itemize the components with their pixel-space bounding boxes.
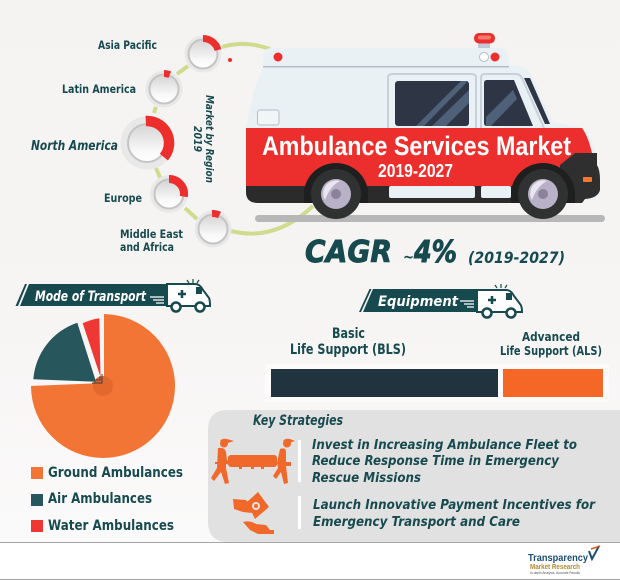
CAGR callout: (2019-2027)	[468, 248, 565, 267]
slice: ground ambulances	[31, 314, 175, 458]
divider	[298, 496, 301, 529]
roof line	[263, 66, 509, 68]
front bumper	[560, 153, 600, 203]
icon: stretcher bearers	[211, 439, 295, 484]
heading: Mode of Transport	[16, 284, 172, 306]
label: Latin America: Latin America	[62, 82, 136, 96]
label: BLS: Life Support (BLS)	[290, 342, 406, 358]
heading: Equipment: Equipment	[378, 294, 459, 310]
bar: ALS	[503, 369, 603, 397]
icon: ambulance (transport)	[167, 279, 210, 312]
marker: red dot	[228, 58, 232, 62]
label: BLS: Basic	[332, 326, 365, 342]
heading: Equipment	[359, 289, 480, 312]
icon: money in hand	[233, 492, 274, 534]
doors	[388, 74, 544, 128]
divider	[298, 440, 301, 482]
donut: Europe	[150, 175, 188, 213]
pie centre marks	[92, 374, 102, 383]
CAGR callout	[305, 235, 565, 270]
donut: Asia Pacific	[184, 36, 222, 72]
label: Europe: Europe	[104, 191, 142, 205]
CAGR callout: CAGR	[305, 235, 392, 270]
legend: air ambulances: Air Ambulances	[48, 491, 152, 507]
slice: air ambulances	[33, 323, 96, 382]
wheel arches	[304, 163, 575, 203]
bar: BLS	[271, 369, 498, 397]
label: Asia Pacific: Asia Pacific	[98, 38, 157, 52]
label: Middle East and Africa: and Africa	[120, 240, 174, 254]
donut: North America	[120, 116, 174, 170]
lower strip	[246, 186, 575, 203]
door sills	[389, 186, 511, 198]
label: Market by Region 2019: Market by Region	[203, 95, 216, 183]
rear panel	[258, 110, 279, 125]
label: North America: North America	[31, 138, 118, 154]
text: strategy one: Invest in Increasing Ambulance Fleet to	[312, 437, 577, 453]
donut: Middle East and Africa	[194, 210, 232, 248]
donut: Latin America	[146, 70, 182, 108]
cab window	[484, 80, 533, 126]
ambulance illustration	[246, 33, 600, 219]
slice: water ambulances	[83, 318, 100, 377]
legend: ground ambulances: Ground Ambulances	[48, 465, 183, 481]
red band	[246, 128, 592, 186]
siren	[474, 33, 495, 48]
logo: Transparency Market Research: In-depth Analysis. Accurate Results	[530, 571, 580, 575]
text: strategy one: Reduce Response Time in Emergency	[312, 453, 560, 469]
bar chart: equipment share	[265, 364, 609, 402]
CAGR callout: 4%	[413, 235, 457, 270]
pie chart: mode of transport	[31, 314, 175, 458]
labels: equipment	[290, 326, 602, 358]
heading: Mode of Transport: Mode of Transport	[35, 289, 147, 305]
heading: key strategies: Key Strategies	[253, 413, 343, 429]
van body	[246, 48, 596, 200]
icon: ambulance (equipment)	[477, 284, 522, 318]
panel: market by region	[31, 36, 232, 254]
panel: key strategies	[208, 410, 620, 542]
label: ALS: Advanced	[522, 329, 580, 344]
text: strategy one: Rescue Missions	[312, 470, 421, 486]
legend: mode of transport	[31, 465, 183, 534]
indicator	[583, 177, 592, 182]
footer	[0, 542, 620, 580]
CAGR callout: ~	[403, 248, 414, 266]
road	[255, 215, 605, 222]
logo: Transparency Market Research	[528, 546, 600, 575]
windshield	[524, 78, 550, 124]
label: Middle East and Africa: Middle East	[120, 227, 183, 241]
region connector lines	[154, 44, 313, 234]
title: Ambulance Services Market	[262, 131, 571, 161]
subtitle: 2019-2027	[378, 161, 453, 181]
roof lights	[274, 52, 500, 62]
rear wheel	[311, 169, 361, 219]
label: Market by Region 2019	[191, 95, 216, 183]
side window	[395, 81, 469, 126]
pie centre shadow	[93, 376, 113, 396]
text: strategy two: Emergency Transport and Care	[313, 514, 520, 530]
logo: Transparency Market Research: Market Research	[530, 562, 580, 571]
legend: water ambulances: Water Ambulances	[48, 518, 174, 534]
label: Market by Region 2019: 2019	[191, 126, 204, 152]
front wheel	[518, 169, 568, 219]
logo: Transparency Market Research: Transparency	[528, 552, 588, 564]
